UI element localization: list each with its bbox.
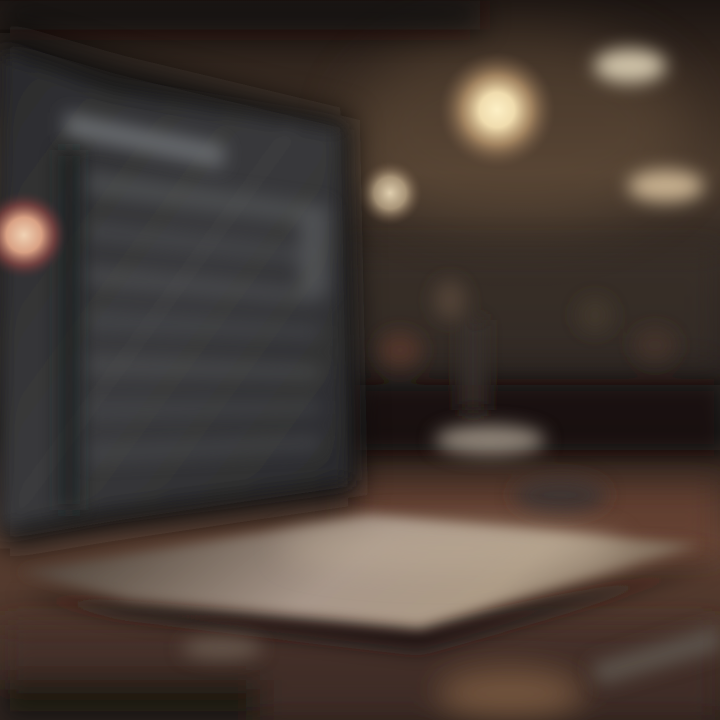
laptop screen — [0, 30, 358, 550]
object: blurred reflection on table — [182, 637, 262, 659]
screen: text rows — [85, 170, 328, 462]
light: main round lamp — [439, 52, 555, 168]
light: small centre lamp — [358, 161, 422, 225]
light: top right lamp — [594, 49, 666, 83]
table: warm wood surface — [0, 485, 720, 720]
object: foreground pen at right — [590, 625, 720, 685]
screen: highlighted title bar — [65, 112, 225, 168]
object: small device on table — [435, 425, 606, 513]
screen: dark vertical margin — [58, 150, 80, 510]
laptop base — [15, 515, 720, 650]
light: red glow on screen — [0, 191, 68, 279]
shelf: blurred background objects — [360, 280, 720, 450]
light: right lamp — [628, 170, 704, 202]
